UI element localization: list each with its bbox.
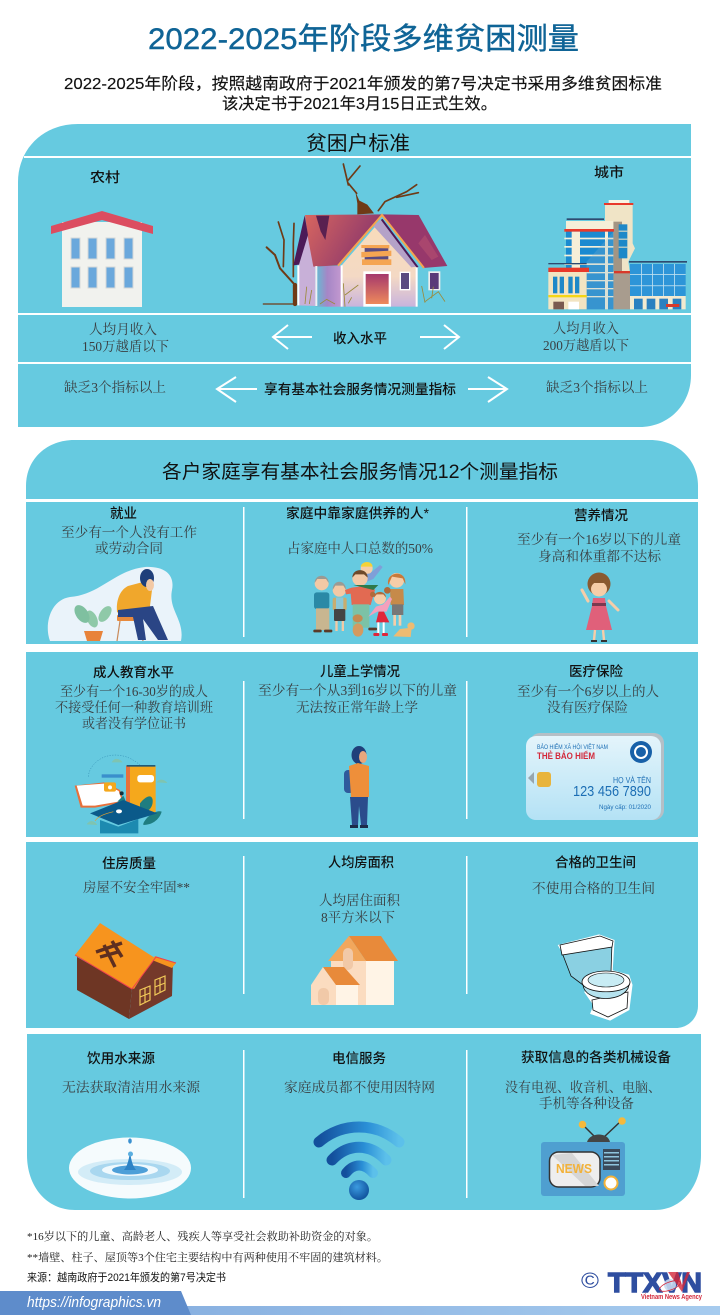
- indicator: sanitary toilet: 合格的卫生间: [555, 855, 636, 870]
- services row: urban: 缺乏3个指标以上: [546, 379, 648, 395]
- label: urban: 城市: [594, 164, 624, 180]
- income row: urban: 200万越盾以下: [543, 337, 629, 353]
- income row: urban: [543, 320, 629, 353]
- indicator: information devices: 没有电视、收音机、电脑、: [505, 1079, 661, 1095]
- icon: insurance card: HỌ VÀ TÊN: [613, 775, 651, 785]
- indicator: nutrition: [517, 507, 681, 564]
- icon: girl: [582, 572, 618, 641]
- indicator: employment: 就业: [110, 506, 137, 521]
- indicator: telecom: 家庭成员都不使用因特网: [284, 1079, 435, 1095]
- logo: TTXVN: ©: [581, 1268, 599, 1293]
- indicator: health insurance: 没有医疗保险: [547, 700, 628, 715]
- indicator: sanitary toilet: [532, 855, 655, 896]
- panel: poverty household standards: [18, 124, 691, 427]
- indicator: nutrition: 营养情况: [574, 507, 628, 523]
- indicator: drinking water: 无法获取清洁用水来源: [62, 1079, 201, 1095]
- indicator: nutrition: 至少有一个16岁以下的儿童: [517, 531, 681, 547]
- logo: TTXVN: Vietnam News Agency: [641, 1294, 702, 1301]
- indicator: health insurance: 至少有一个6岁以上的人: [517, 683, 660, 699]
- indicator: child schooling: [258, 663, 457, 715]
- label: income level: 收入水平: [333, 331, 387, 346]
- footer band with URL: [0, 1291, 720, 1315]
- indicator: drinking water: [62, 1051, 201, 1095]
- indicator: per capita housing area: 人均居住面积: [319, 893, 400, 908]
- indicator: information devices: 手机等各种设备: [539, 1095, 635, 1111]
- icon: books and graduation cap: [75, 755, 167, 833]
- icon: rural building: [51, 211, 153, 307]
- indicator: information devices: [505, 1049, 672, 1111]
- services row: rural: 缺乏3个指标以上: [64, 379, 166, 395]
- icon: insurance card: 123 456 7890: [573, 783, 651, 800]
- indicator: child schooling: 至少有一个从3到16岁以下的儿童: [258, 682, 457, 698]
- footnotes: 来源：越南政府于2021年颁发的第7号决定书: [27, 1270, 226, 1284]
- footnotes: *16岁以下的儿童、高龄老人、残疾人等享受社会救助补助资金的对象。: [27, 1229, 378, 1243]
- income row: rural: [82, 321, 169, 354]
- indicator: per capita housing area: 8平方米以下: [321, 909, 395, 925]
- arrow: services left: [217, 377, 257, 402]
- panel: 12 indicators heading: 各户家庭享有基本社会服务情况12个测量指标: [162, 461, 558, 483]
- icon: student: [344, 746, 369, 828]
- income row: urban: 人均月收入: [553, 320, 619, 336]
- panel heading: 贫困户标准: [306, 132, 410, 155]
- icon: wifi: [319, 1127, 399, 1200]
- icon: dilapidated house: [263, 164, 447, 307]
- indicator: dependents: [286, 505, 433, 556]
- intro text: 2022-2025年阶段，按照越南政府于2021年颁发的第7号决定书采用多维贫困标准: [64, 75, 662, 93]
- arrow: income left: [273, 325, 312, 349]
- income row: rural: 人均月收入: [89, 321, 158, 337]
- icon: family: [313, 562, 415, 637]
- icon: television: [541, 1117, 626, 1196]
- indicator: telecom: [284, 1051, 435, 1095]
- icon: insurance card: BẢO HIỂM XÃ HỘI VIỆT NAM: [537, 742, 608, 751]
- indicator: adult education: 不接受任何一种教育培训班: [55, 699, 213, 715]
- indicator: child schooling: 无法按正常年龄上学: [296, 699, 419, 715]
- indicator: adult education: 至少有一个16-30岁的成人: [60, 683, 208, 699]
- indicator: per capita housing area: [319, 855, 400, 925]
- indicator: housing quality: 房屋不安全牢固**: [83, 879, 190, 895]
- intro text: 该决定书于2021年3月15日正式生效。: [222, 95, 497, 113]
- indicator: housing quality: 住房质量: [102, 855, 156, 871]
- indicator: telecom: 电信服务: [332, 1051, 386, 1066]
- indicator: employment: 或劳动合同: [95, 540, 163, 556]
- indicator: dependents: 占家庭中人口总数的50%: [287, 540, 433, 556]
- icon: insurance card: Ngày cấp: 01/2020: [599, 802, 651, 811]
- icon: unsafe house: [75, 923, 176, 1019]
- footer band with URL: https://infographics.vn: [27, 1294, 161, 1311]
- indicator: sanitary toilet: 不使用合格的卫生间: [532, 880, 655, 896]
- indicator: adult education: 成人教育水平: [93, 664, 174, 680]
- panel: indicators row 2: [26, 652, 698, 837]
- indicator: adult education: [55, 664, 213, 731]
- icon: houses: [311, 936, 398, 1005]
- footnotes: [27, 1229, 388, 1284]
- icon: television: NEWS: [556, 1161, 592, 1176]
- panel: indicators row 4: [27, 1034, 701, 1210]
- icon: worried man: [48, 567, 182, 641]
- arrow: income right: [420, 325, 459, 349]
- indicator: child schooling: 儿童上学情况: [320, 663, 400, 679]
- indicator: housing quality: [83, 855, 190, 895]
- indicator: adult education: 或者没有学位证书: [82, 715, 186, 731]
- icon: toilet: [560, 936, 631, 1019]
- icon: insurance card: [526, 733, 664, 820]
- icon: insurance card: THẺ BẢO HIỂM: [537, 750, 595, 762]
- indicator: per capita housing area: 人均房面积: [328, 855, 394, 870]
- panel: indicators row 3: [26, 842, 698, 1028]
- indicator: health insurance: [517, 663, 660, 715]
- arrow: services right: [468, 377, 507, 402]
- logo: TTXVN: [581, 1267, 702, 1301]
- indicator: nutrition: 身高和体重都不达标: [538, 548, 662, 564]
- icon: water drop: [69, 1138, 191, 1198]
- label: rural: 农村: [90, 170, 121, 185]
- footnotes: **墙壁、柱子、屋顶等3个住宅主要结构中有两种使用不牢固的建筑材料。: [27, 1250, 388, 1264]
- intro text: [64, 75, 662, 113]
- label: service measurement indicators: 享有基本社会服务情况测量指标: [264, 381, 457, 397]
- indicator: dependents: 家庭中靠家庭供养的人*: [286, 505, 430, 521]
- indicator: drinking water: 饮用水来源: [87, 1051, 156, 1066]
- panel: indicators row 1: [26, 502, 698, 644]
- panel: 12 indicators heading: [26, 440, 698, 499]
- indicator: information devices: 获取信息的各类机械设备: [521, 1049, 672, 1065]
- icon: city buildings: [548, 200, 687, 309]
- indicator: employment: [61, 506, 198, 556]
- title: 2022-2025年阶段多维贫困测量: [148, 23, 579, 56]
- logo: TTXVN: TTXVN: [608, 1267, 702, 1298]
- income row: rural: 150万越盾以下: [82, 338, 169, 354]
- indicator: employment: 至少有一个人没有工作: [61, 525, 198, 540]
- indicator: health insurance: 医疗保险: [569, 663, 623, 679]
